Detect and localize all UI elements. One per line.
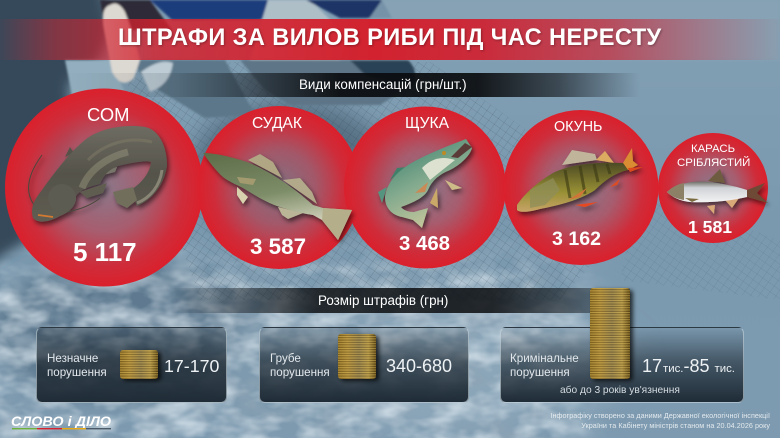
icon: roach xyxy=(667,169,768,214)
circle: щука xyxy=(344,106,506,268)
text: criminal violation label: порушення xyxy=(510,366,570,379)
value: сом: 5 117 xyxy=(73,237,137,267)
value: окунь: 3 162 xyxy=(552,228,601,250)
subheading bar: fine size: Розмір штрафів (грн) xyxy=(318,293,448,308)
amount: 17 тис.-85 тис.: 17тис.-85 тис. xyxy=(642,356,735,376)
subheading bar: compensation types xyxy=(60,73,640,97)
value: судак: 3 587 xyxy=(250,234,306,259)
label: карась сріблястий: СРІБЛЯСТИЙ xyxy=(677,156,750,168)
panel: criminal violation xyxy=(500,327,744,403)
value: карась: 1 581 xyxy=(688,217,732,237)
panel: gross violation xyxy=(259,327,469,403)
label: окунь: ОКУНЬ xyxy=(554,119,602,135)
subheading bar: fine size xyxy=(170,288,630,313)
title banner xyxy=(0,19,780,60)
text: minor violation label xyxy=(47,352,107,379)
icon: zander xyxy=(203,153,352,240)
label: карась сріблястий xyxy=(677,143,750,168)
label: щука: ЩУКА xyxy=(405,115,449,132)
circle: сом xyxy=(5,88,203,286)
value: щука: 3 468 xyxy=(399,233,450,255)
fisherman dark silhouette xyxy=(0,0,112,270)
fisherman and boat xyxy=(65,0,780,118)
icon: perch xyxy=(517,148,643,212)
text: prison note: або до 3 років ув'язнення xyxy=(560,385,680,396)
source note xyxy=(550,411,770,430)
text: criminal violation label: Кримінальне xyxy=(510,352,579,365)
title text: ШТРАФИ ЗА ВИЛОВ РИБИ ПІД ЧАС НЕРЕСТУ xyxy=(118,25,662,51)
text: minor violation label: порушення xyxy=(47,366,107,379)
source note: Інфографіку створено за даними Державної екологічної інспекції xyxy=(550,411,770,420)
label: судак: СУДАК xyxy=(252,115,302,132)
logo: Слово і Діло: СЛОВО і ДІЛО xyxy=(11,413,111,429)
text: criminal violation label xyxy=(510,352,579,379)
label: сом: СОМ xyxy=(87,104,130,125)
source note: України та Кабінету міністрів станом на 20.04.2026 року xyxy=(581,420,770,430)
text: minor violation label: Незначне xyxy=(47,352,98,365)
amount: 340-680: 340-680 xyxy=(386,356,452,376)
text: gross violation label: Грубе xyxy=(270,352,301,365)
label: карась сріблястий: КАРАСЬ xyxy=(691,143,735,155)
text: gross violation label xyxy=(270,352,330,379)
icon: coin stack medium xyxy=(338,334,376,379)
circle: судак xyxy=(198,106,360,269)
text: gross violation label: порушення xyxy=(270,366,330,379)
circle: карась xyxy=(658,133,768,243)
icon: coin stack small xyxy=(120,350,158,379)
circle: окунь xyxy=(504,110,658,265)
icon: coin stack large xyxy=(590,288,630,379)
subheading bar: compensation types: Види компенсацій (грн/шт.) xyxy=(299,77,467,92)
amount: 17-170: 17-170 xyxy=(164,356,219,376)
icon: catfish xyxy=(29,126,167,222)
panel: minor violation xyxy=(36,327,227,403)
icon: pike xyxy=(378,139,472,228)
